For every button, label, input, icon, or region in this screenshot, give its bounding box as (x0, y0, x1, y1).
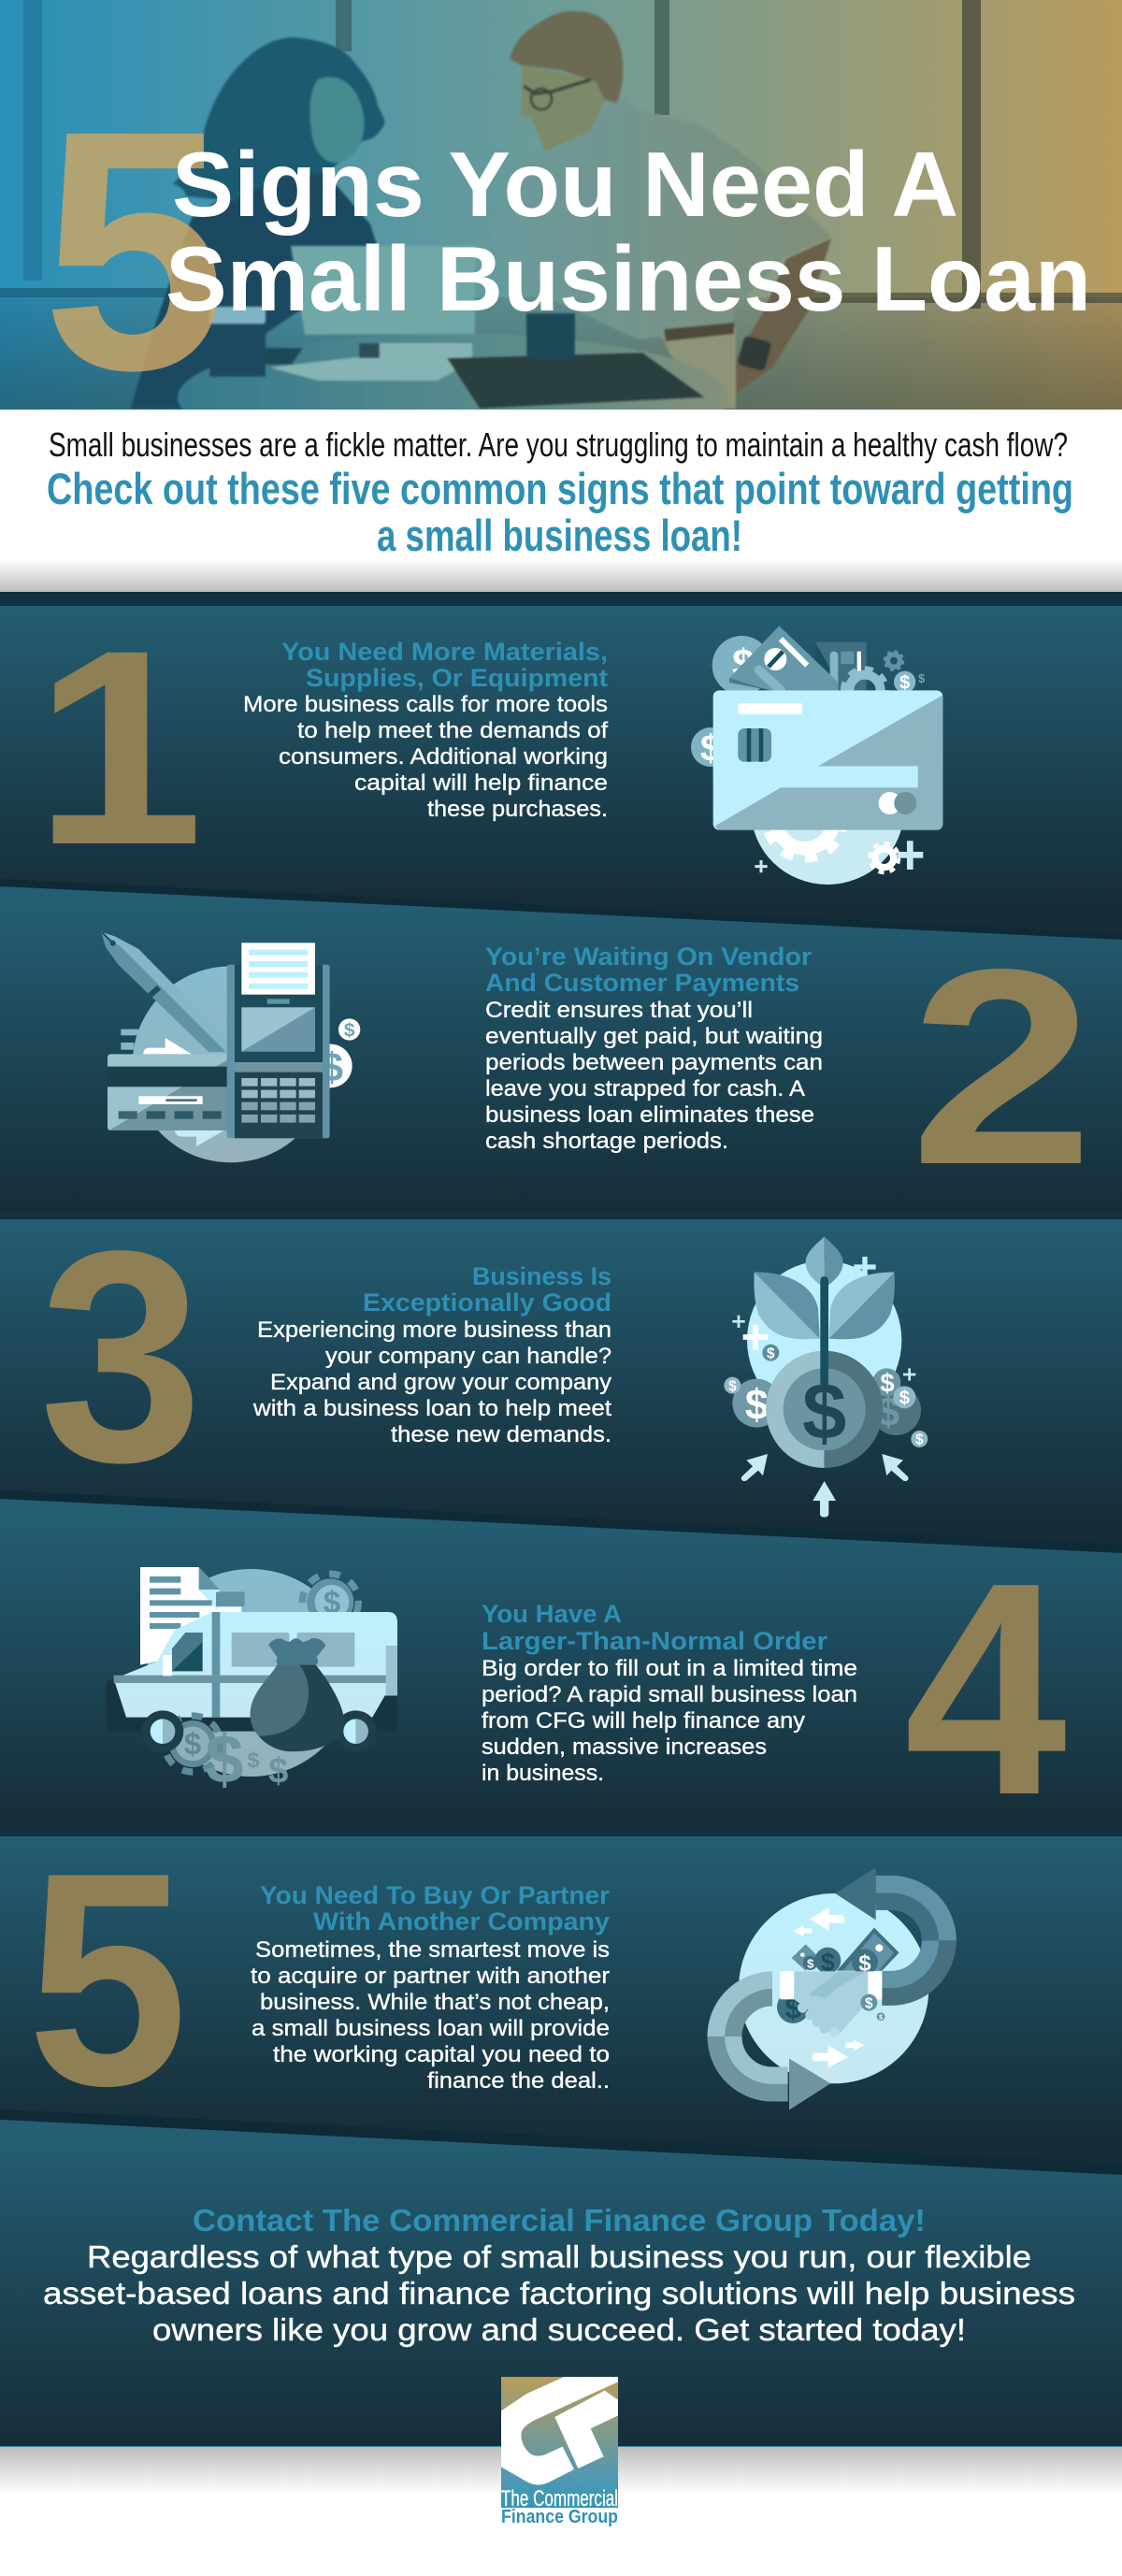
body text 5: business. While that’s not cheap, (260, 1990, 610, 2015)
title: Small Business Loan (165, 227, 1091, 330)
icon: money plant: $ (745, 1380, 769, 1428)
icon: money plant: $ (915, 1432, 924, 1448)
logo: Finance Group (501, 2507, 618, 2527)
icon: credit card with gears: $ (732, 642, 755, 687)
body text 3: your company can handle? (325, 1344, 611, 1369)
icon: money plant: $ (767, 1346, 775, 1361)
card (108, 1054, 227, 1130)
icon: money plant: $ (728, 1378, 737, 1394)
money notes: $ (821, 1948, 835, 1976)
lower gear and dollars: $ (268, 1751, 288, 1792)
heading 5 (260, 1881, 611, 1936)
icon: credit card with gears: $ (918, 672, 925, 685)
intro section (0, 410, 1122, 592)
footer (0, 2446, 1122, 2576)
number 4: 4 (904, 1519, 1069, 1858)
money bag (251, 1638, 344, 1751)
title (168, 150, 1086, 311)
heading 2: You’re Waiting On Vendor (485, 943, 813, 971)
icon: credit card with gears (691, 626, 942, 885)
body text 4: in business. (482, 1761, 604, 1786)
icon: money plant (724, 1237, 928, 1518)
handshake: $ (865, 1995, 873, 2011)
body text 2: cash shortage periods. (485, 1129, 728, 1154)
body text 1: to help meet the demands of (297, 718, 608, 743)
heading 1 (281, 638, 608, 692)
panel 3: business is good (0, 1189, 1122, 1544)
panel 5: buy or partner (0, 1809, 1122, 2163)
heading 1: You Need More Materials, (281, 638, 608, 666)
icon: money plant: $ (877, 1390, 899, 1435)
icon: payment terminal, card and pen: $ (321, 1046, 343, 1091)
body text 1: More business calls for more tools (243, 692, 608, 717)
handshake (777, 1971, 885, 2037)
white arrows (793, 1907, 864, 2068)
heading 5: You Need To Buy Or Partner (260, 1881, 611, 1909)
hero banner (0, 0, 1122, 410)
heading 4: You Have A (482, 1600, 622, 1628)
panel 2: payments (0, 886, 1122, 1223)
terminal (227, 943, 330, 1138)
body text 2: business loan eliminates these (485, 1102, 814, 1128)
contact heading: Contact The Commercial Finance Group Today! (193, 2203, 926, 2238)
body text 2: periods between payments can (485, 1050, 823, 1075)
photo: table with papers, cups and folio (177, 245, 728, 410)
body text 5: Sometimes, the smartest move is (255, 1937, 610, 1963)
icon: delivery truck with money bag: $ (324, 1586, 341, 1620)
money notes: $ (858, 1950, 871, 1976)
body text 1: consumers. Additional working (279, 744, 608, 770)
icon: payment terminal, card and pen (101, 932, 360, 1162)
money notes: $ (807, 1956, 814, 1970)
big number 5: 5 (42, 61, 226, 441)
body text 3: Experiencing more business than (257, 1317, 611, 1343)
logo mark (501, 2377, 618, 2484)
contact text: owners like you grow and succeed. Get started today! (152, 2312, 966, 2347)
body text 1: these purchases. (427, 797, 608, 822)
lower gear and dollars: $ (206, 1721, 243, 1798)
body text 3 (252, 1317, 611, 1447)
heading 3: Business Is (472, 1262, 611, 1290)
intro call to action (47, 464, 1073, 560)
contact text (43, 2239, 1075, 2347)
icon: credit card with gears: $ (700, 727, 721, 769)
body text 5: finance the deal.. (427, 2068, 610, 2094)
icon: payment terminal, card and pen: $ (344, 1020, 355, 1042)
heading 2: And Customer Payments (485, 969, 799, 997)
body text 5: to acquire or partner with another (251, 1964, 610, 1989)
body text 5 (251, 1937, 610, 2094)
lower gear and dollars (165, 1716, 288, 1798)
handshake: $ (785, 1991, 802, 2024)
body text 1: capital will help finance (354, 770, 608, 796)
body text 1 (243, 692, 608, 822)
number 1: 1 (34, 592, 204, 902)
body text 3: Expand and grow your company (270, 1370, 611, 1395)
icon: credit card with gears: $ (899, 673, 910, 694)
lower gear and dollars: $ (184, 1728, 202, 1763)
pen (101, 932, 226, 1052)
intro call to action: a small business loan! (377, 511, 742, 560)
upper arrow (835, 1867, 947, 1996)
lower gear and dollars: $ (247, 1749, 259, 1773)
document (140, 1567, 245, 1665)
icon: money plant: $ (802, 1367, 846, 1456)
body text 2: eventually get paid, but waiting (485, 1024, 823, 1049)
wheels (142, 1710, 377, 1752)
panel 6: contact (0, 2120, 1122, 2446)
icon: money plant: $ (880, 1368, 895, 1397)
logo (501, 2377, 618, 2527)
heading 4: Larger-Than-Normal Order (482, 1627, 828, 1655)
truck (106, 1612, 397, 1732)
money notes (792, 1928, 899, 1976)
contact text: Regardless of what type of small business you run, our flexible (87, 2239, 1031, 2274)
lower arrow (716, 1980, 830, 2110)
icon: money plant: $ (899, 1389, 910, 1409)
panel 4: large order (0, 1499, 1122, 1858)
number 3: 3 (39, 1189, 203, 1525)
heading 3: Exceptionally Good (363, 1288, 611, 1317)
body text 3: with a business loan to help meet (252, 1396, 611, 1421)
heading 1: Supplies, Or Equipment (306, 664, 608, 692)
body text 4 (482, 1656, 857, 1786)
heading 5: With Another Company (313, 1907, 610, 1936)
body text 3: these new demands. (391, 1422, 611, 1447)
heading 2 (485, 943, 813, 997)
body text 4: from CFG will help finance any (482, 1708, 805, 1734)
heading 4 (482, 1600, 828, 1655)
photo: woman (131, 37, 385, 409)
body text 4: period? A rapid small business loan (482, 1682, 857, 1707)
handshake: $ (879, 2012, 883, 2021)
heading 3 (363, 1262, 611, 1317)
body text 5: the working capital you need to (273, 2042, 610, 2067)
body text 2: Credit ensures that you’ll (485, 998, 753, 1023)
number 5: 5 (27, 1809, 188, 2149)
body text 2: leave you strapped for cash. A (485, 1076, 805, 1101)
body text 2 (485, 998, 823, 1154)
body text 5: a small business loan will provide (252, 2016, 610, 2041)
number 2: 2 (910, 912, 1094, 1223)
contact text: asset-based loans and finance factoring solutions will help business (43, 2276, 1075, 2310)
icon: delivery truck with money bag (106, 1567, 397, 1798)
body text 4: sudden, massive increases (482, 1734, 767, 1760)
title: Signs You Need A (172, 133, 958, 236)
icon: handshake with circular arrows (716, 1867, 947, 2110)
logo text: The Commercial (501, 2486, 618, 2511)
panel 1: materials (0, 592, 1122, 933)
photo: man (491, 11, 831, 409)
body text 4: Big order to fill out in a limited time (482, 1656, 857, 1681)
